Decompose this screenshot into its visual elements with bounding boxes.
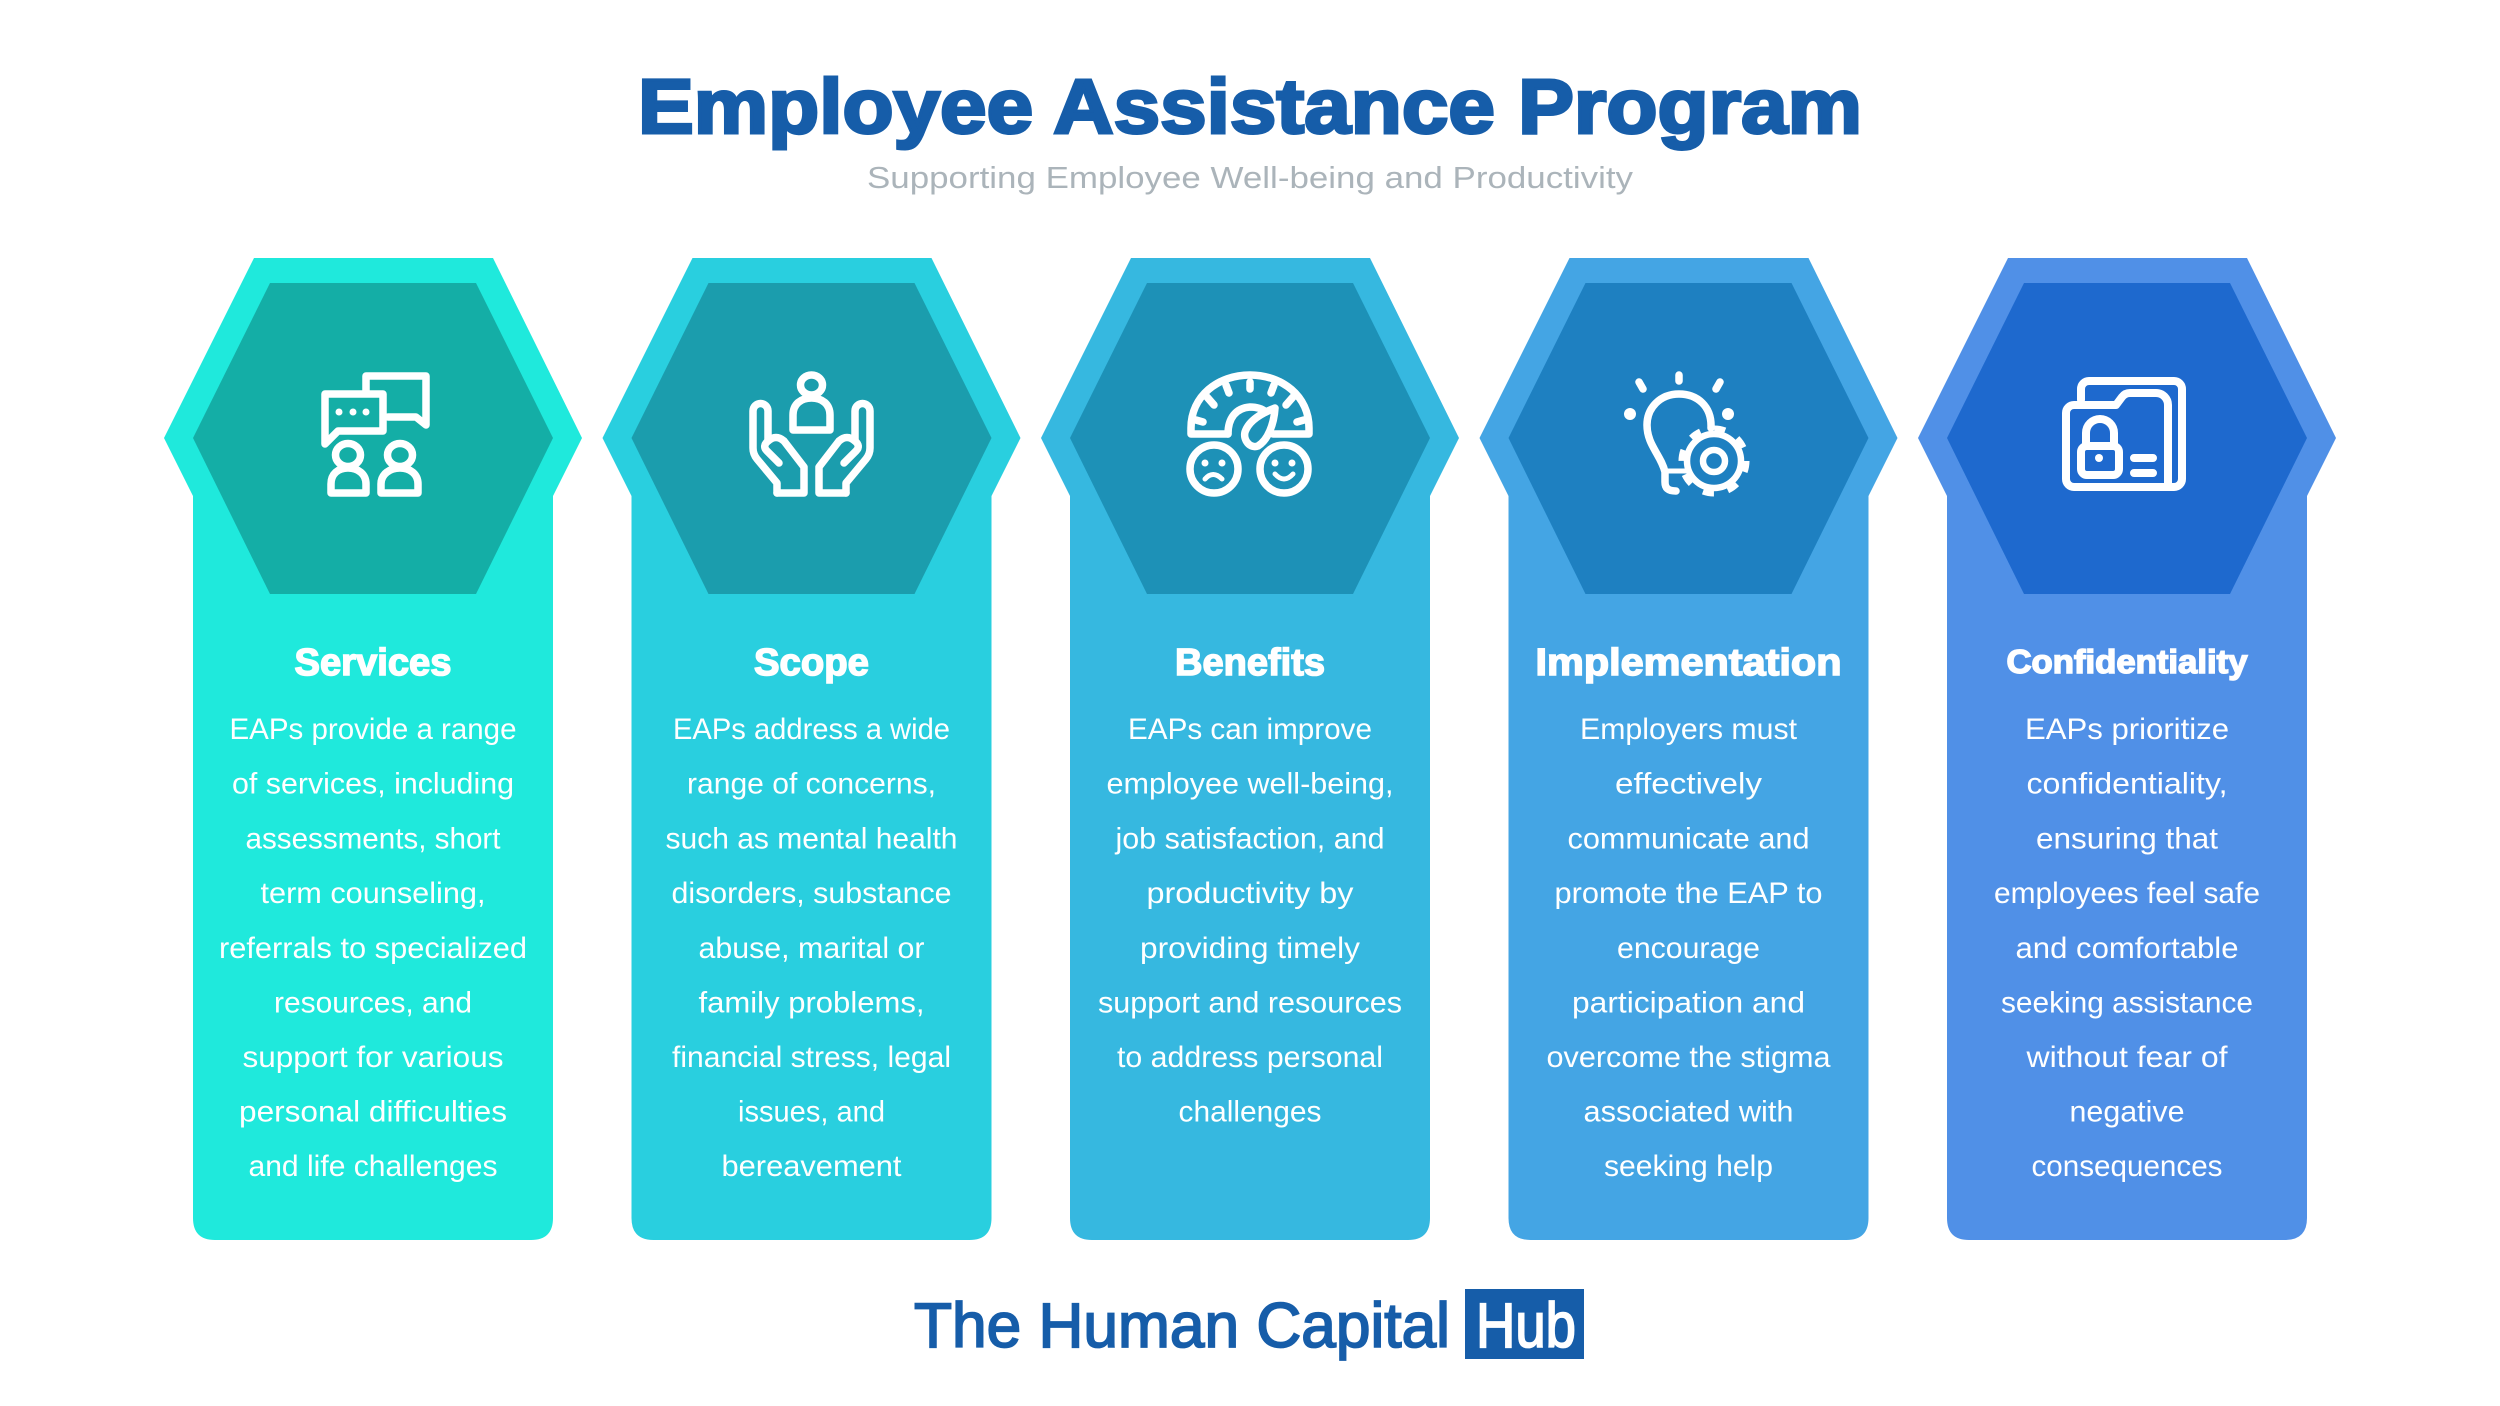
body text (1994, 713, 2260, 1183)
card shape (1480, 258, 1898, 1240)
body text: seeking assistance (2001, 987, 2253, 1020)
panel: scope (602, 258, 1020, 1240)
body text: consequences (2032, 1150, 2222, 1183)
inner hexagon (193, 283, 553, 594)
body text: disorders, substance (672, 877, 952, 910)
body text: range of concerns, (687, 768, 936, 801)
inner hexagon (632, 283, 992, 594)
body text: productivity by (1146, 877, 1354, 910)
title: Employee Assistance Program (638, 64, 1862, 150)
inner hexagon (1947, 283, 2307, 594)
body text: support for various (242, 1041, 504, 1074)
body text: EAPs address a wide (673, 713, 950, 746)
body text (666, 713, 958, 1183)
panel: implementation (1480, 258, 1898, 1240)
logo box text: Hub (1476, 1291, 1576, 1361)
body text: participation and (1572, 987, 1805, 1020)
icon: hands holding person (753, 375, 870, 493)
body text: and comfortable (2016, 932, 2238, 965)
card shape (1041, 258, 1459, 1240)
panel: benefits (1041, 258, 1459, 1240)
body text: negative (2070, 1096, 2184, 1129)
body text: EAPs can improve (1128, 713, 1372, 746)
body text: issues, and (738, 1096, 885, 1129)
body text: confidentiality, (2026, 768, 2228, 801)
body text: challenges (1178, 1096, 1322, 1129)
body text (1098, 713, 1402, 1129)
body text: employees feel safe (1994, 877, 2260, 910)
subtitle: Supporting Employee Well-being and Productivity (867, 160, 1634, 195)
heading: Benefits (1175, 642, 1325, 684)
icon: chat bubbles and people (325, 376, 426, 493)
body text (219, 713, 527, 1183)
card shape (1918, 258, 2336, 1240)
body text: and life challenges (248, 1150, 498, 1183)
body text: to address personal (1117, 1041, 1383, 1074)
body text: such as mental health (666, 822, 958, 856)
body text: encourage (1617, 932, 1760, 965)
body text: Employers must (1580, 713, 1798, 746)
body text: family problems, (698, 987, 924, 1020)
logo wordmark: The Human Capital (914, 1291, 1450, 1361)
body text: overcome the stigma (1546, 1041, 1831, 1074)
body text: of services, including (232, 768, 514, 801)
heading: Confidentiality (2006, 643, 2248, 680)
body text: job satisfaction, and (1114, 822, 1384, 856)
inner hexagon (1070, 283, 1430, 594)
body text: communicate and (1568, 822, 1810, 856)
inner hexagon (1508, 283, 1868, 594)
heading: Scope (754, 642, 869, 684)
body text: financial stress, legal (672, 1041, 951, 1074)
logo box (1465, 1289, 1584, 1359)
body text: abuse, marital or (698, 932, 925, 965)
heading: Implementation (1536, 642, 1842, 684)
body text: providing timely (1140, 932, 1360, 965)
panel: confidentiality (1918, 258, 2336, 1240)
body text (1546, 713, 1831, 1183)
body text: effectively (1615, 768, 1762, 801)
heading: Services (294, 642, 452, 684)
body text: ensuring that (2036, 822, 2219, 856)
icon: light bulb and gear (1624, 375, 1746, 493)
body text: promote the EAP to (1554, 877, 1822, 910)
body text: without fear of (2025, 1041, 2228, 1074)
card shape (164, 258, 582, 1240)
body text: support and resources (1098, 987, 1402, 1020)
body text: resources, and (274, 987, 472, 1020)
body text: seeking help (1604, 1150, 1773, 1183)
body text: referrals to specialized (219, 932, 527, 965)
panel: services (164, 258, 582, 1240)
icon: locked folder (2066, 381, 2182, 487)
logo: The Human Capital Hub (914, 1289, 1584, 1361)
body text: employee well-being, (1106, 768, 1394, 801)
body text: personal difficulties (239, 1096, 507, 1129)
body text: bereavement (722, 1150, 902, 1183)
body text: EAPs provide a range (230, 713, 516, 746)
body text: EAPs prioritize (2025, 713, 2229, 746)
icon: gauge and faces (1190, 375, 1309, 493)
body text: associated with (1584, 1096, 1794, 1129)
card shape (602, 258, 1020, 1240)
body text: term counseling, (260, 877, 486, 910)
body text: assessments, short (246, 822, 501, 856)
